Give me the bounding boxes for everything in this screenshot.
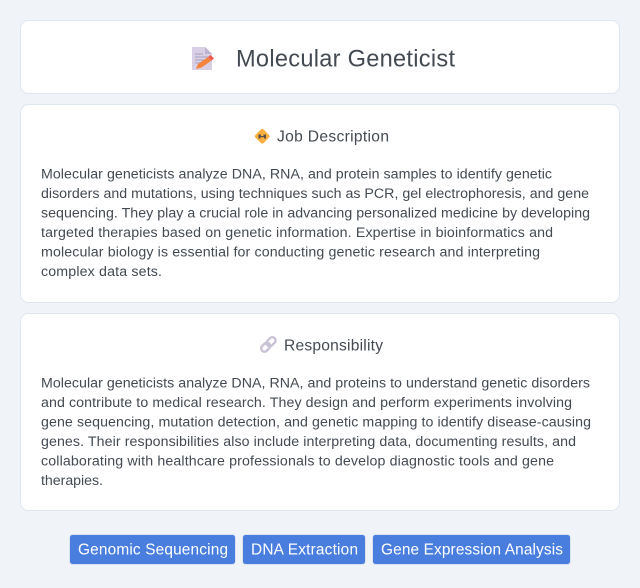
text block: job description: disorders and mutations, using techniques such as PCR, gel electrophoresis, and gene <box>41 186 589 202</box>
text block: responsibility: genes. Their responsibilities also include interpreting data, documenting results, and <box>41 434 576 450</box>
text block: job description <box>41 166 590 280</box>
tag: gene expression analysis <box>372 534 570 564</box>
tag: genomic sequencing: Genomic Sequencing <box>78 542 228 558</box>
text block: responsibility: gene sequencing, mutation detection, and genetic mapping to identify disease-causing <box>41 414 591 430</box>
icon: document with pencil <box>192 47 214 70</box>
text block: job description: molecular biology is essential for conducting genetic research and interpreting <box>41 244 540 260</box>
panel: title card <box>20 20 620 94</box>
text block: job description: complex data sets. <box>41 264 162 280</box>
text block: responsibility: therapies. <box>41 473 103 489</box>
tag: genomic sequencing <box>70 534 236 564</box>
text block: responsibility <box>41 375 591 489</box>
heading: responsibility: Responsibility <box>284 338 383 354</box>
text block: job description: targeted therapies based on genetic information. Expertise in bioinformatics and <box>41 225 553 241</box>
tag: gene expression analysis: Gene Expression Analysis <box>381 542 563 558</box>
text block: responsibility: and contribute to medical research. They design and perform experiments involving <box>41 395 572 411</box>
panel: responsibility <box>20 314 620 510</box>
text block: responsibility: Molecular geneticists analyze DNA, RNA, and proteins to understand genetic disorders <box>41 375 590 391</box>
heading: job description: Job Description <box>277 128 389 146</box>
icon: orange diamond sign <box>254 128 270 144</box>
panel: job description <box>20 104 620 302</box>
icon: chain link <box>260 336 277 353</box>
text block: job description: sequencing. They play a crucial role in advancing personalized medicine by developing <box>41 205 590 221</box>
text block: responsibility: collaborating with healthcare professionals to develop diagnostic tools and gene <box>41 453 554 469</box>
text block: job description: Molecular geneticists analyze DNA, RNA, and protein samples to identify genetic <box>41 166 552 182</box>
tag: dna extraction: DNA Extraction <box>251 542 358 558</box>
title: Molecular Geneticist <box>236 46 455 72</box>
tag: dna extraction <box>242 534 366 564</box>
